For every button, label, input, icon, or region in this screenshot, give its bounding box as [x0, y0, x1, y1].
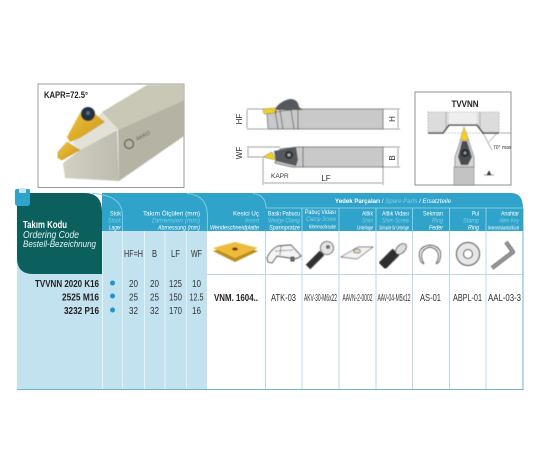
dimension values: 170 — [169, 306, 182, 317]
header: shim: Altlık — [362, 210, 374, 218]
dimension values: 150 — [169, 292, 182, 304]
header: stamp — [463, 210, 479, 232]
icon: allen key — [492, 242, 513, 268]
panel: header band — [30, 193, 523, 231]
column headers: dimensions — [124, 249, 202, 260]
ordering codes: TVVNN 2020 K16 — [35, 279, 99, 290]
label: B: B — [388, 155, 397, 161]
icon: shim screw — [382, 242, 408, 266]
icon: ring — [419, 245, 441, 264]
header: stock: Stok — [110, 210, 122, 218]
panel: ordering code heading: Takım Kodu — [23, 220, 67, 231]
icon: tool holder photo: AKKO — [135, 130, 152, 143]
dimension values: 25 — [150, 292, 159, 304]
header: wedge clamp: Baskı Pabucu — [268, 210, 300, 218]
header: clamp screw: Clamp Screw — [306, 216, 337, 223]
column headers: dimensions: LF — [171, 249, 180, 260]
header: dimensions — [143, 210, 200, 232]
header: ring: Feder — [429, 224, 444, 232]
header: shim screw: Schraube für Unterlage — [379, 226, 409, 232]
icon: tab — [15, 189, 30, 206]
header: stock: Lager — [109, 224, 122, 232]
header: shim screw: Shim Screw — [382, 218, 410, 224]
header: insert: Wendeschneidplatte — [210, 224, 259, 232]
dimension values: 32 — [150, 306, 159, 317]
column headers: dimensions: HF=H — [124, 249, 143, 260]
dimension values: 125 — [169, 279, 182, 290]
header: dimensions: Abmessung (mm) — [157, 224, 200, 232]
table: ordering table — [15, 188, 523, 390]
insert code: VNM. 1604.. — [214, 293, 258, 304]
stock dots — [110, 280, 115, 312]
header: stock: Stock — [108, 218, 122, 224]
label: WF: WF — [235, 147, 244, 159]
panel: ordering code heading: Ordering Code — [23, 230, 79, 241]
spare part codes: AAV-04-M5x12 — [378, 293, 411, 304]
icon: insert — [213, 242, 258, 262]
dimension values: 12.5 — [190, 292, 204, 304]
dimension values: 32 — [129, 306, 138, 317]
spare part codes: AAL-03-3 — [488, 293, 521, 304]
ordering codes: 2525 M16 — [62, 292, 99, 304]
icon: tool holder photo — [58, 84, 184, 181]
column headers: dimensions: B — [152, 249, 157, 260]
dimension values: 20 — [150, 279, 159, 290]
icon: shim — [341, 247, 373, 259]
header: stamp: Pul — [472, 210, 479, 218]
column headers: dimensions: WF — [191, 249, 202, 260]
icon: clamp screw — [308, 242, 334, 267]
ordering codes — [35, 279, 99, 317]
header: stamp: Ring — [468, 224, 479, 232]
panel: tool photo — [38, 84, 184, 188]
header: insert — [210, 210, 260, 232]
header: ring: Ring — [432, 218, 443, 224]
ordering codes: 3232 P16 — [64, 306, 99, 317]
header: allen key: Anahtar — [501, 210, 520, 218]
spare part codes: ATK-03 — [271, 293, 296, 304]
header: clamp screw — [305, 209, 337, 230]
technical drawing: top view — [247, 147, 400, 185]
label: KAPR: KAPR — [271, 173, 289, 180]
header: shim — [357, 210, 374, 232]
technical drawing: side view — [247, 99, 400, 129]
icon: stamp ring — [456, 242, 480, 266]
header: wedge clamp: Spannpratze — [269, 224, 300, 232]
panel: table body white columns — [207, 231, 523, 390]
label: KAPR angle: KAPR=72.5° — [44, 90, 88, 100]
header: insert: Insert — [245, 218, 260, 224]
icon: wedge clamp — [267, 245, 301, 263]
panel: ordering code heading: Bestell-Bezeichnung — [23, 239, 97, 250]
dimension values — [129, 279, 204, 317]
heading: TVVNN: TVVNN — [452, 99, 479, 110]
header: stock — [108, 210, 122, 232]
spare part codes: AS-01 — [420, 293, 441, 304]
spare part codes: AKV-30-M6x22 — [304, 293, 337, 304]
header: shim: Shim — [362, 218, 373, 224]
dimension values: 20 — [129, 279, 138, 290]
header: wedge clamp — [268, 210, 300, 232]
header: allen key — [488, 210, 520, 232]
spare part codes — [271, 293, 521, 304]
header: spare parts: Yedek Parçaları / Spare Parts / Ersatzteile — [335, 198, 451, 205]
header: shim: Unterlage — [357, 226, 373, 232]
spare part codes: AAVN-2-0002 — [342, 293, 373, 304]
header: dimensions: Takım Ölçüleri (mm) — [143, 210, 200, 218]
header: allen key: Allen Key — [498, 218, 520, 224]
panel: TVVNN machining diagram — [415, 92, 512, 185]
header: ring — [423, 210, 444, 232]
panel: ordering code heading — [15, 188, 102, 274]
header: wedge clamp: Wedge Clamp — [268, 218, 300, 224]
header: dimensions: Dimension (mm) — [152, 218, 200, 224]
header: ring: Sekman — [423, 210, 443, 218]
header: stamp: Stamp — [463, 218, 479, 224]
dimension values: 16 — [192, 306, 201, 317]
label: H: H — [388, 116, 397, 122]
header: clamp screw: Pabuç Vidası — [305, 209, 336, 216]
dimension values: 25 — [129, 292, 138, 304]
header: clamp screw: Klemmschraube — [309, 224, 336, 230]
dimension values: 10 — [192, 279, 201, 290]
spare part codes: ABPL-01 — [453, 293, 482, 304]
header: shim screw — [379, 210, 410, 232]
header: insert: Kesici Uç — [233, 210, 260, 218]
label: 70 degree max: 70° max — [493, 145, 512, 151]
panel: table body blue columns — [17, 231, 207, 390]
header: shim screw: Altlık Vidası — [382, 210, 409, 218]
label: HF: HF — [235, 114, 244, 124]
label: LF: LF — [321, 174, 331, 183]
